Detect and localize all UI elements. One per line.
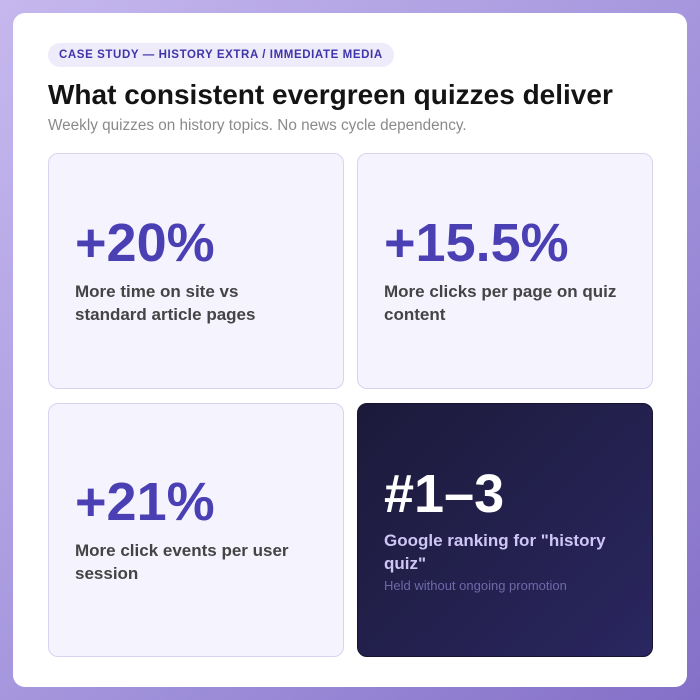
panel: time on site [48,153,344,389]
panel: google ranking [357,403,653,657]
panel: google ranking: quiz" [384,554,426,573]
panel: click events [48,403,344,657]
panel: google ranking: Held without ongoing promotion [384,578,567,593]
panel: clicks per page: content [384,305,445,324]
panel: google ranking: Google ranking for "history [384,531,606,550]
panel: clicks per page [357,153,653,389]
panel: click events: session [75,564,138,583]
panel: click events: More click events per user [75,541,289,560]
panel: clicks per page: More clicks per page on quiz [384,282,616,301]
tag pill: CASE STUDY — HISTORY EXTRA / IMMEDIATE MEDIA [59,49,383,61]
panel: time on site: More time on site vs [75,282,238,301]
panel: click events: +21% [75,472,215,532]
panel: time on site: +20% [75,213,215,273]
panel: google ranking: #1–3 [384,464,504,524]
subtitle: Weekly quizzes on history topics. No news cycle dependency. [48,117,467,134]
panel: time on site: standard article pages [75,305,255,324]
panel: clicks per page: +15.5% [384,213,569,273]
title: What consistent evergreen quizzes deliver [48,79,613,110]
tag pill [48,43,394,67]
